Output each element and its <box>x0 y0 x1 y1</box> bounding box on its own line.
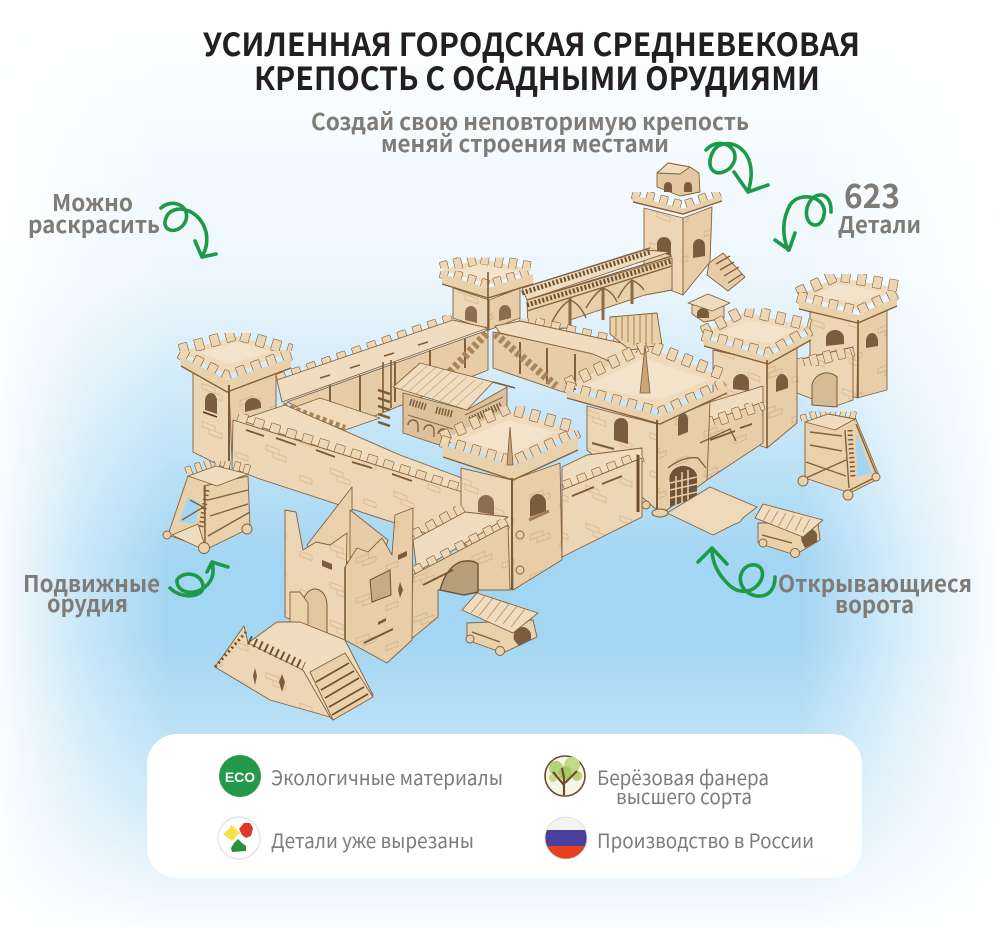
arrow: from parts count <box>775 195 831 250</box>
entrance stairs <box>215 622 373 720</box>
title: КРЕПОСТЬ С ОСАДНЫМИ ОРУДИЯМИ <box>254 54 820 100</box>
arch wall, right side <box>797 347 853 407</box>
title <box>203 20 860 100</box>
covered bridge <box>522 248 672 330</box>
long front wall <box>232 405 462 545</box>
subtitle callout: Создай свою неповторимую крепость <box>311 103 749 137</box>
left gallery <box>277 319 488 430</box>
far right tower <box>798 275 897 398</box>
left tower <box>180 334 291 470</box>
icon: puzzle pieces <box>218 817 260 859</box>
feature: eco materials: Экологичные материалы <box>271 762 503 791</box>
centre back tower <box>441 258 533 330</box>
cart: front <box>462 593 538 656</box>
callout: can be painted: раскрасить <box>28 206 160 240</box>
arrow: to drawbridge <box>698 548 775 596</box>
callout: movable weapons: Подвижные <box>23 565 160 599</box>
bridge wall with arch <box>410 508 510 640</box>
house <box>393 363 515 446</box>
callout: can be painted <box>28 184 160 240</box>
subtitle callout: меняй строения местами <box>381 125 669 159</box>
icon: eco badge <box>219 755 261 797</box>
main gate tower <box>566 345 736 510</box>
callout: movable weapons: орудия <box>47 585 128 619</box>
small cart: back <box>688 294 730 322</box>
icon: eco badge: ECO <box>225 769 255 785</box>
subtitle callout <box>311 103 749 159</box>
icon: russian flag <box>544 816 588 860</box>
siege tower: right <box>798 412 880 500</box>
wall to gate tower <box>562 448 650 557</box>
icon: birch tree <box>545 756 585 796</box>
feature: made in russia: Производство в России <box>597 825 814 854</box>
callout: parts count: Детали <box>838 206 921 240</box>
palisade <box>610 313 662 350</box>
callout: parts count <box>838 170 921 240</box>
callout: parts count: 623 <box>844 170 900 218</box>
cart: right <box>755 504 823 558</box>
ruined tower <box>285 487 413 663</box>
castle model <box>163 163 897 720</box>
front tower <box>441 408 578 590</box>
callout: opening gates: Открывающиеся <box>778 565 972 599</box>
callout: movable weapons <box>23 565 160 619</box>
callout: can be painted: Можно <box>52 184 133 218</box>
right gallery <box>493 320 640 392</box>
callout: opening gates: ворота <box>835 586 914 620</box>
arrow: to back tower <box>706 143 768 192</box>
portcullis <box>669 466 697 508</box>
middle tower <box>703 310 811 448</box>
siege tower: left <box>163 462 252 554</box>
panel: features <box>147 734 862 878</box>
arrow: from paint label <box>161 203 216 257</box>
callout: opening gates <box>778 565 972 620</box>
feature: birch plywood <box>597 762 769 810</box>
drawbridge <box>652 487 757 535</box>
feature: pre-cut parts: Детали уже вырезаны <box>271 825 474 854</box>
feature: birch plywood: высшего сорта <box>616 781 752 810</box>
feature: birch plywood: Берёзовая фанера <box>597 762 769 791</box>
back tower <box>633 163 745 295</box>
wall beside gate <box>707 386 763 480</box>
arrow: to siege tower <box>170 562 228 596</box>
title: УСИЛЕННАЯ ГОРОДСКАЯ СРЕДНЕВЕКОВАЯ <box>203 20 860 66</box>
